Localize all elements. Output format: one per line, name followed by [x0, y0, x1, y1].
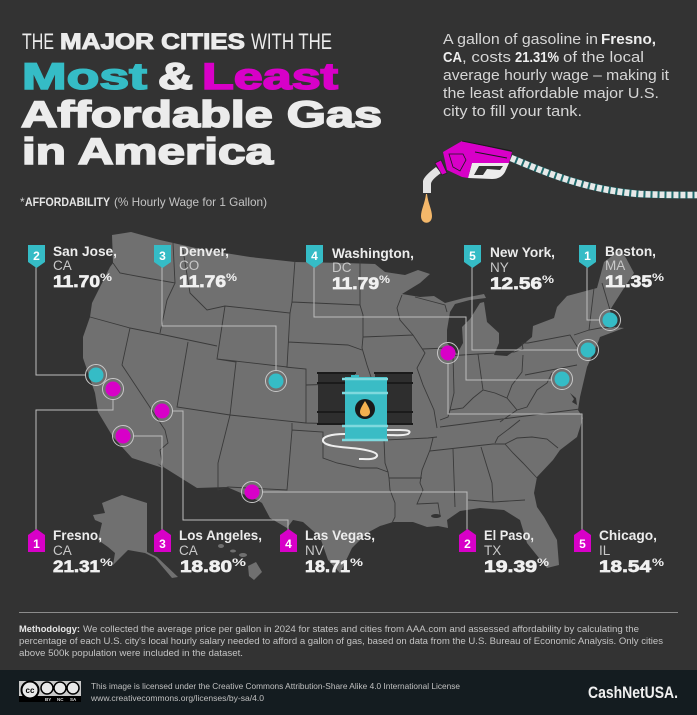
label: Los Angeles: % — [232, 557, 246, 569]
label: Fresno — [28, 527, 113, 576]
label: New York: New York, — [490, 244, 555, 260]
label: Denver: % — [226, 272, 237, 284]
icon: Creative Commons badge: BY — [45, 697, 51, 702]
title: THE — [22, 29, 54, 54]
marker: New York — [578, 340, 598, 360]
title: in America — [22, 131, 274, 172]
label: Las Vegas: % — [350, 557, 363, 569]
label: Los Angeles — [154, 527, 262, 576]
label: Los Angeles: 18.80 — [180, 557, 232, 576]
label: Denver — [154, 243, 237, 291]
title — [21, 29, 382, 172]
intro text: the least affordable major U.S. — [443, 85, 659, 102]
label: Chicago: Chicago, — [599, 527, 657, 543]
label: San Jose — [28, 243, 117, 291]
marker: Chicago — [438, 342, 458, 364]
intro text: 21.31% — [515, 49, 559, 66]
label: Washington: % — [379, 274, 390, 286]
label: Boston: % — [652, 272, 664, 284]
label: Washington — [306, 245, 414, 293]
icon: Creative Commons badge: NC — [57, 697, 64, 702]
map: Hawaii — [218, 544, 262, 580]
label: Washington: Washington, — [332, 245, 414, 261]
label: Chicago: % — [652, 557, 664, 569]
label: Fresno: 1 — [33, 537, 40, 551]
methodology: percentage of each U.S. city's local hourly salary needed to afford a gallon of gas, based on data from the U.S. Bureau of Economic Analysis. Only cities — [19, 636, 663, 647]
title: & — [158, 56, 193, 97]
marker: Boston — [600, 310, 620, 330]
label: New York: 5 — [469, 249, 476, 263]
marker: Fresno — [102, 378, 124, 400]
label: Las Vegas — [280, 527, 375, 576]
label: Denver: Denver, — [179, 243, 229, 259]
label: Los Angeles: CA — [179, 543, 198, 558]
label: Las Vegas: 4 — [285, 537, 292, 551]
intro text: city to fill your tank. — [443, 103, 582, 120]
license text: This image is licensed under the Creative Commons Attribution-Share Alike 4.0 International License — [91, 681, 460, 691]
label: Boston — [579, 243, 664, 291]
intro text: CA — [443, 49, 462, 66]
affordability note: * — [20, 195, 25, 209]
icon: oil barrels — [317, 372, 413, 459]
label: Chicago: 18.54 — [599, 557, 652, 576]
label: Los Angeles: 3 — [159, 537, 166, 551]
label: New York — [464, 244, 555, 293]
marker: Washington — [552, 368, 572, 390]
marker: Denver — [266, 370, 286, 392]
label: Denver: CO — [179, 258, 199, 273]
label: Fresno: CA — [53, 543, 72, 558]
label: Fresno: Fresno, — [53, 527, 102, 543]
label: El Paso: % — [537, 557, 549, 569]
icon: Creative Commons badge — [19, 681, 81, 702]
label: Boston: 11.35 — [605, 272, 652, 291]
methodology: above 500k population were included in the dataset. — [19, 648, 243, 659]
methodology: Methodology: — [19, 624, 80, 635]
label: Boston: MA — [605, 258, 625, 273]
affordability note: (% Hourly Wage for 1 Gallon) — [114, 195, 267, 209]
license text: www.creativecommons.org/licenses/by-sa/4.0 — [90, 693, 264, 703]
label: New York: % — [542, 274, 554, 286]
icon: Creative Commons badge: SA — [70, 697, 77, 702]
methodology: We collected the average price per gallon in 2024 for states and cities from AAA.com and assessed affordability by calculating the — [83, 624, 639, 635]
icon: fuel drop — [421, 194, 432, 223]
license text — [90, 681, 460, 703]
icon: fuel nozzle — [423, 141, 512, 193]
label: Washington: DC — [332, 260, 352, 275]
map: United States — [83, 232, 634, 580]
intro text: A gallon of gasoline in — [443, 31, 598, 48]
marker: El Paso — [242, 482, 262, 502]
intro text: average hourly wage – making it — [443, 67, 670, 84]
title: Least — [202, 56, 338, 97]
label: Fresno: 21.31 — [53, 557, 100, 576]
label: San Jose: % — [100, 272, 112, 284]
label: El Paso: 2 — [464, 537, 471, 551]
label: Las Vegas: 18.71 — [305, 557, 350, 576]
dark barrels — [317, 372, 413, 425]
affordability note: AFFORDABILITY — [25, 195, 110, 209]
label: Denver: 3 — [159, 249, 166, 263]
label: Las Vegas: NV — [305, 543, 324, 558]
intro text: of the local — [563, 49, 644, 66]
logo: CashNetUSA: CashNetUSA. — [588, 683, 678, 702]
label: Chicago: 5 — [579, 537, 586, 551]
title: Most — [22, 56, 147, 97]
barrel drop badge — [355, 399, 375, 419]
label: Las Vegas: Las Vegas, — [305, 527, 375, 543]
leader lines — [36, 265, 600, 530]
hose on the floor — [323, 430, 410, 459]
label: Fresno: % — [100, 557, 113, 569]
label: El Paso: 19.39 — [484, 557, 537, 576]
label: El Paso: El Paso, — [484, 527, 534, 543]
title: WITH THE — [251, 29, 332, 54]
label: Washington: 4 — [311, 249, 318, 263]
intro text: , costs — [462, 49, 511, 66]
teal barrel — [345, 377, 387, 441]
label: San Jose: San Jose, — [53, 243, 117, 259]
icon: gas hose — [511, 158, 697, 195]
label: Denver: 11.76 — [179, 272, 226, 291]
label: San Jose: 11.70 — [53, 272, 100, 291]
label: New York: 12.56 — [490, 274, 542, 293]
label: Boston: 1 — [584, 249, 591, 263]
label: Washington: 11.79 — [332, 274, 379, 293]
label: Boston: Boston, — [605, 243, 656, 259]
icon: Creative Commons badge: cc — [26, 686, 35, 695]
intro text: Fresno, — [601, 31, 656, 48]
title: Affordable Gas — [21, 94, 382, 135]
methodology — [19, 624, 663, 659]
marker: Las Vegas — [152, 400, 172, 422]
label: Los Angeles: Los Angeles, — [179, 527, 262, 543]
affordability note — [20, 195, 267, 209]
label: El Paso: TX — [484, 543, 501, 558]
marker: Los Angeles — [112, 426, 134, 446]
label: Chicago — [574, 527, 664, 576]
title: MAJOR CITIES — [60, 29, 245, 54]
label: Chicago: IL — [599, 543, 611, 558]
footer — [0, 670, 697, 715]
label: New York: NY — [490, 260, 509, 275]
label: El Paso — [459, 527, 549, 576]
intro text — [443, 31, 670, 120]
label: San Jose: CA — [53, 258, 72, 273]
map: Alaska — [93, 495, 178, 578]
marker: San Jose — [86, 364, 106, 386]
label: San Jose: 2 — [33, 249, 40, 263]
